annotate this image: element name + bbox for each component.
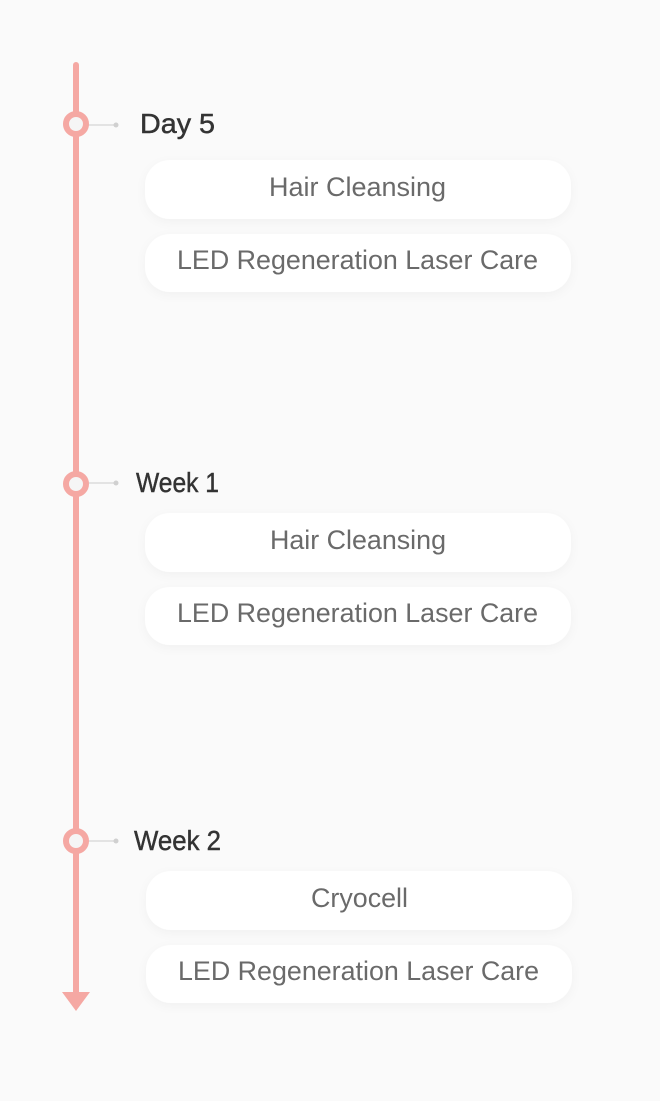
- pill: Hair Cleansing: [145, 160, 571, 219]
- section: Day 5: [66, 108, 571, 292]
- pill: LED Regeneration Laser Care: [145, 234, 571, 292]
- pill: Hair Cleansing: Hair Cleansing: [270, 525, 446, 555]
- timeline arrow: [62, 62, 90, 1011]
- section: Week 2: [66, 825, 572, 1003]
- heading: Day 5: Day 5: [140, 108, 215, 139]
- pill: LED Regeneration Laser Care: [146, 945, 572, 1003]
- section: Week 1: [66, 467, 571, 645]
- pill: Hair Cleansing: [145, 513, 571, 572]
- pill: Cryocell: Cryocell: [311, 883, 408, 913]
- pill: LED Regeneration Laser Care: LED Regeneration Laser Care: [177, 598, 538, 628]
- heading: Week 1: Week 1: [136, 467, 219, 498]
- pill: LED Regeneration Laser Care: LED Regeneration Laser Care: [178, 956, 539, 986]
- heading: Week 2: Week 2: [134, 825, 221, 856]
- pill: LED Regeneration Laser Care: [145, 587, 571, 645]
- pill: Cryocell: [146, 871, 572, 930]
- marker: Day 5: [66, 114, 118, 134]
- marker: Week 1: [66, 474, 118, 494]
- pill: LED Regeneration Laser Care: LED Regeneration Laser Care: [177, 245, 538, 275]
- pill: Hair Cleansing: Hair Cleansing: [269, 172, 446, 202]
- marker: Week 2: [66, 831, 118, 851]
